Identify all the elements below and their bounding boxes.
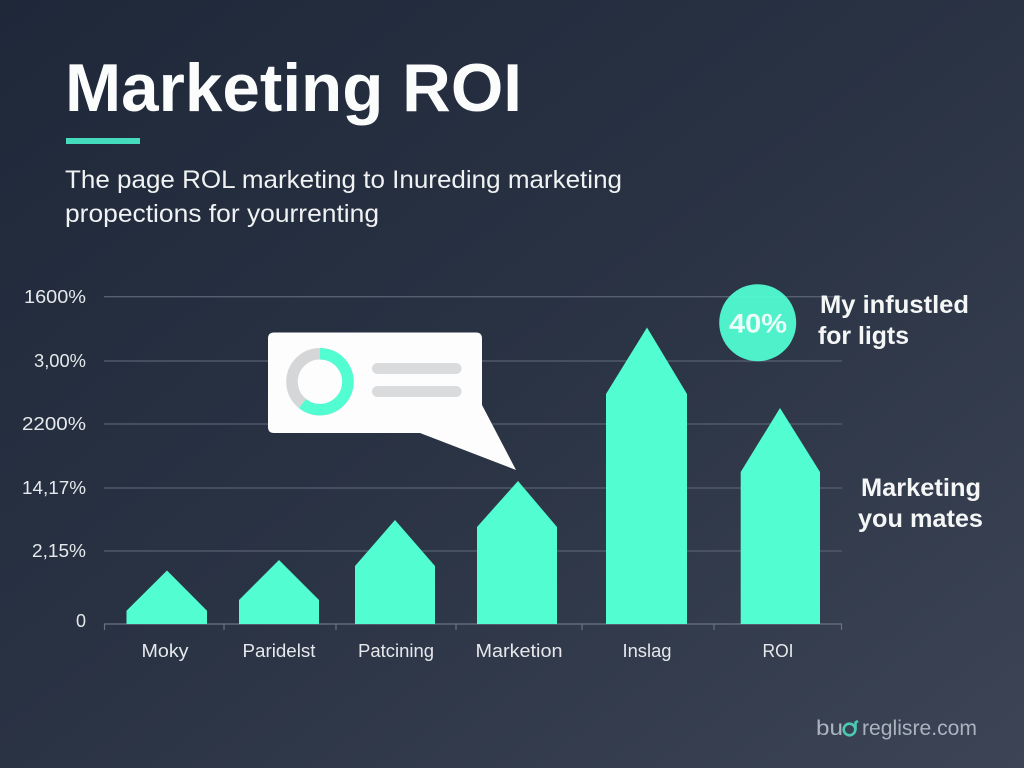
y axis labels: 2200% [22, 414, 86, 434]
bars [126, 328, 820, 624]
side note: Marketing [861, 474, 981, 502]
x axis labels: Paridelst [242, 641, 316, 661]
callout body and tail [268, 332, 516, 470]
x axis with ticks [104, 624, 842, 630]
y axis labels: 1600% [24, 287, 86, 307]
stat caption [818, 291, 969, 350]
stat caption: for ligts [818, 322, 909, 350]
subtitle: The page ROL marketing to Inureding marketing [65, 166, 622, 194]
bar: Moky [126, 570, 207, 624]
y axis labels: 2,15% [32, 541, 86, 561]
subtitle: propections for yourrenting [65, 200, 379, 228]
bar: Inslag [606, 328, 687, 624]
bar: Marketion [477, 481, 557, 624]
callout placeholder lines [372, 363, 462, 397]
side note [858, 474, 983, 533]
x axis labels [142, 641, 794, 661]
y axis labels: 14,17% [22, 478, 86, 498]
chart grid lines [104, 297, 842, 551]
footer brand: reglisre.com [862, 717, 977, 740]
stat badge: 40%: 40% [729, 308, 787, 338]
x axis labels: ROI [762, 641, 794, 661]
y axis labels [22, 287, 86, 631]
title: Marketing ROI [65, 50, 522, 126]
subtitle [65, 166, 622, 228]
stat caption: My infustled [820, 291, 969, 319]
bar chart [22, 287, 842, 661]
callout donut icon [292, 354, 348, 410]
side note: you mates [858, 505, 983, 533]
stat badge: 40% [719, 284, 796, 361]
x axis labels: Moky [142, 641, 188, 661]
y axis labels: 3,00% [34, 351, 86, 371]
bar: Paridelst [239, 560, 319, 624]
x axis labels: Patcining [358, 641, 434, 661]
y axis labels: 0 [76, 611, 86, 631]
title accent underline [66, 138, 140, 144]
bar: Patcining [355, 520, 435, 624]
icon: brand d glyph [844, 721, 858, 735]
footer brand: bu [816, 717, 843, 740]
x axis labels: Inslag [622, 641, 672, 661]
x axis labels: Marketion [476, 641, 562, 661]
callout bubble [268, 332, 516, 470]
bar: ROI [741, 408, 820, 624]
